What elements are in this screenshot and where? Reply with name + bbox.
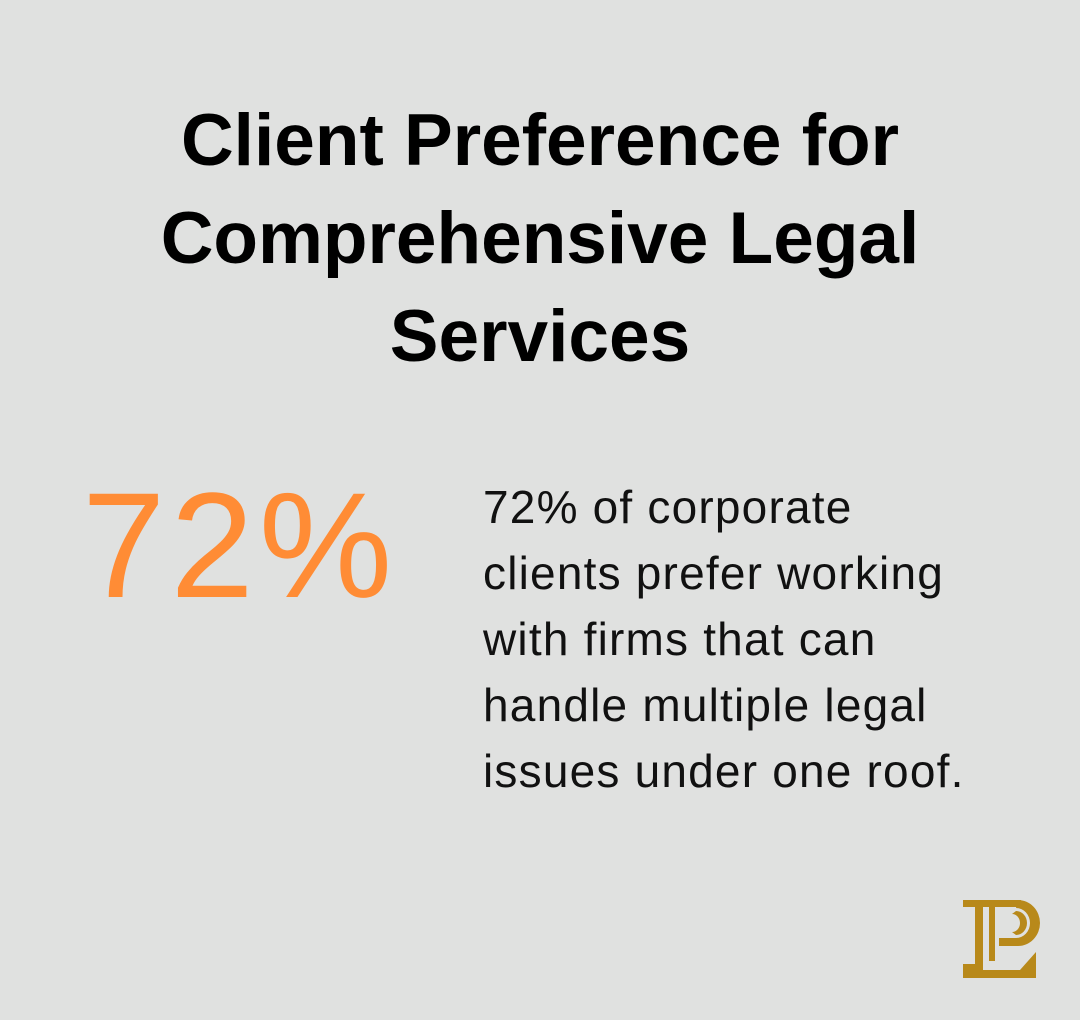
title: [161, 100, 919, 377]
description text: issues under one roof.: [483, 745, 965, 797]
description text: 72% of corporate: [483, 481, 853, 533]
description text: with firms that can: [483, 613, 876, 665]
title: Client Preference for: [181, 100, 899, 181]
description text: handle multiple legal: [483, 679, 928, 731]
description text: clients prefer working: [483, 547, 944, 599]
title: Comprehensive Legal: [161, 198, 919, 279]
description text: [483, 481, 965, 797]
title: Services: [390, 296, 690, 377]
big stat: 72%: 72%: [82, 461, 397, 629]
